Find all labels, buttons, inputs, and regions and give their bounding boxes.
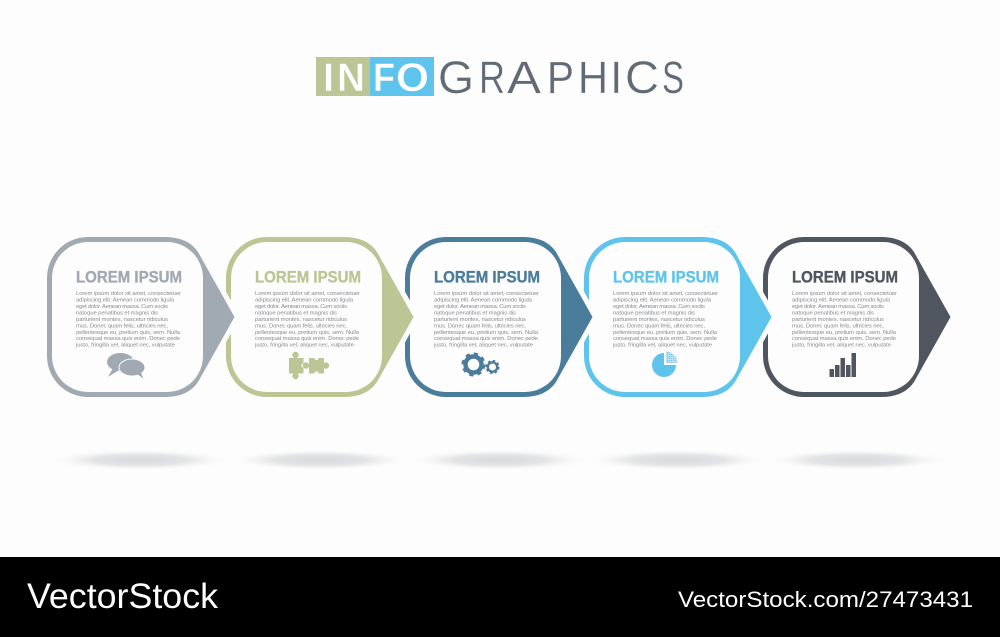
title: I xyxy=(323,56,334,100)
body text 2: justo, fringilla vel, aliquet nec, vulputate xyxy=(254,343,355,349)
body text 3: parturient montes, nascetur ridiculus xyxy=(434,317,526,323)
body text 3 xyxy=(433,291,539,349)
body text 4: adipiscing elit. Aenean commodo ligula xyxy=(613,298,712,304)
title: G xyxy=(438,52,474,103)
body text 2: eget dolor. Aenean massa. Cum sociis xyxy=(255,304,347,310)
body text 3: adipiscing elit. Aenean commodo ligula xyxy=(434,298,533,304)
body text 5: mus. Donec quam felis, ultricies nec, xyxy=(792,323,884,329)
body text 4: parturient montes, nascetur ridiculus xyxy=(613,317,705,323)
footer id: VectorStock.com/27473431 xyxy=(678,587,973,612)
footer logo: VectorStock xyxy=(27,577,219,616)
body text 4: Lorem ipsum dolor sit amet, consectetuer xyxy=(613,291,718,297)
body text 1: natoque penatibus et magnis dis xyxy=(76,310,158,316)
body text 2: parturient montes, nascetur ridiculus xyxy=(255,317,347,323)
body text 1: mus. Donec quam felis, ultricies nec, xyxy=(76,323,168,329)
body text 1: eget dolor. Aenean massa. Cum sociis xyxy=(76,304,168,310)
body text 4: pellentesque eu, pretium quis, sem. Nulla xyxy=(613,330,718,336)
body text 5: adipiscing elit. Aenean commodo ligula xyxy=(792,298,891,304)
icon: bar chart xyxy=(830,353,856,377)
body text 1: pellentesque eu, pretium quis, sem. Nulla xyxy=(76,330,181,336)
title: F xyxy=(373,56,395,100)
body text 1 xyxy=(75,291,181,349)
body text 2 xyxy=(254,291,360,349)
body text 5 xyxy=(791,291,897,349)
body text 3: eget dolor. Aenean massa. Cum sociis xyxy=(434,304,526,310)
body text 5: natoque penatibus et magnis dis xyxy=(792,310,874,316)
title: O xyxy=(396,56,429,100)
body text 2: pellentesque eu, pretium quis, sem. Nulla xyxy=(255,330,360,336)
panel: step 3 teal xyxy=(405,237,592,397)
title: H xyxy=(578,52,608,103)
body text 5: pellentesque eu, pretium quis, sem. Nulla xyxy=(792,330,897,336)
body text 3: consequat massa quis enim. Donec pede xyxy=(434,336,539,342)
body text 5: Lorem ipsum dolor sit amet, consectetuer xyxy=(792,291,897,297)
heading 4: LOREM IPSUM xyxy=(613,268,719,286)
icon: pie chart xyxy=(652,352,678,377)
shadow 4 xyxy=(584,449,772,471)
panel: step 5 dark xyxy=(763,237,950,397)
heading 2: LOREM IPSUM xyxy=(255,268,361,286)
panel: step 4 sky blue xyxy=(584,237,772,397)
body text 3: pellentesque eu, pretium quis, sem. Nulla xyxy=(434,330,539,336)
body text 4: natoque penatibus et magnis dis xyxy=(613,310,695,316)
panel: step 2 olive xyxy=(226,237,414,397)
body text 3: Lorem ipsum dolor sit amet, consectetuer xyxy=(434,291,539,297)
title: P xyxy=(547,52,574,103)
body text 4: consequat massa quis enim. Donec pede xyxy=(613,336,718,342)
shadow 1 xyxy=(46,449,234,471)
body text 1: consequat massa quis enim. Donec pede xyxy=(76,336,181,342)
icon: gears xyxy=(463,354,499,375)
icon: puzzle xyxy=(289,352,329,379)
body text 2: adipiscing elit. Aenean commodo ligula xyxy=(255,298,354,304)
body text 4 xyxy=(612,291,718,349)
body text 4: mus. Donec quam felis, ultricies nec, xyxy=(613,323,705,329)
shadow 2 xyxy=(226,449,414,471)
heading 3: LOREM IPSUM xyxy=(434,268,540,286)
body text 1: Lorem ipsum dolor sit amet, consectetuer xyxy=(76,291,181,297)
icon: chat bubbles xyxy=(107,353,145,378)
heading 1: LOREM IPSUM xyxy=(76,268,182,286)
body text 3: mus. Donec quam felis, ultricies nec, xyxy=(434,323,526,329)
title: S xyxy=(662,52,684,103)
panel: step 1 grey xyxy=(47,237,234,397)
body text 2: Lorem ipsum dolor sit amet, consectetuer xyxy=(255,291,360,297)
body text 2: natoque penatibus et magnis dis xyxy=(255,310,337,316)
body text 5: eget dolor. Aenean massa. Cum sociis xyxy=(792,304,884,310)
footer bar xyxy=(0,557,1000,637)
body text 1: parturient montes, nascetur ridiculus xyxy=(76,317,168,323)
title: A xyxy=(507,52,541,103)
body text 3: justo, fringilla vel, aliquet nec, vulputate xyxy=(433,343,534,349)
body text 3: natoque penatibus et magnis dis xyxy=(434,310,516,316)
body text 5: parturient montes, nascetur ridiculus xyxy=(792,317,884,323)
body text 2: consequat massa quis enim. Donec pede xyxy=(255,336,360,342)
body text 2: mus. Donec quam felis, ultricies nec, xyxy=(255,323,347,329)
body text 1: justo, fringilla vel, aliquet nec, vulputate xyxy=(75,343,176,349)
title xyxy=(316,52,684,103)
heading 5: LOREM IPSUM xyxy=(792,268,898,286)
body text 5: consequat massa quis enim. Donec pede xyxy=(792,336,897,342)
title: R xyxy=(479,52,505,103)
body text 1: adipiscing elit. Aenean commodo ligula xyxy=(76,298,175,304)
title: I xyxy=(610,52,623,103)
body text 4: eget dolor. Aenean massa. Cum sociis xyxy=(613,304,705,310)
shadow 3 xyxy=(405,449,593,471)
body text 4: justo, fringilla vel, aliquet nec, vulputate xyxy=(612,343,713,349)
title: C xyxy=(625,52,659,103)
shadow 5 xyxy=(763,449,951,471)
title: N xyxy=(337,56,365,100)
body text 5: justo, fringilla vel, aliquet nec, vulputate xyxy=(791,343,892,349)
